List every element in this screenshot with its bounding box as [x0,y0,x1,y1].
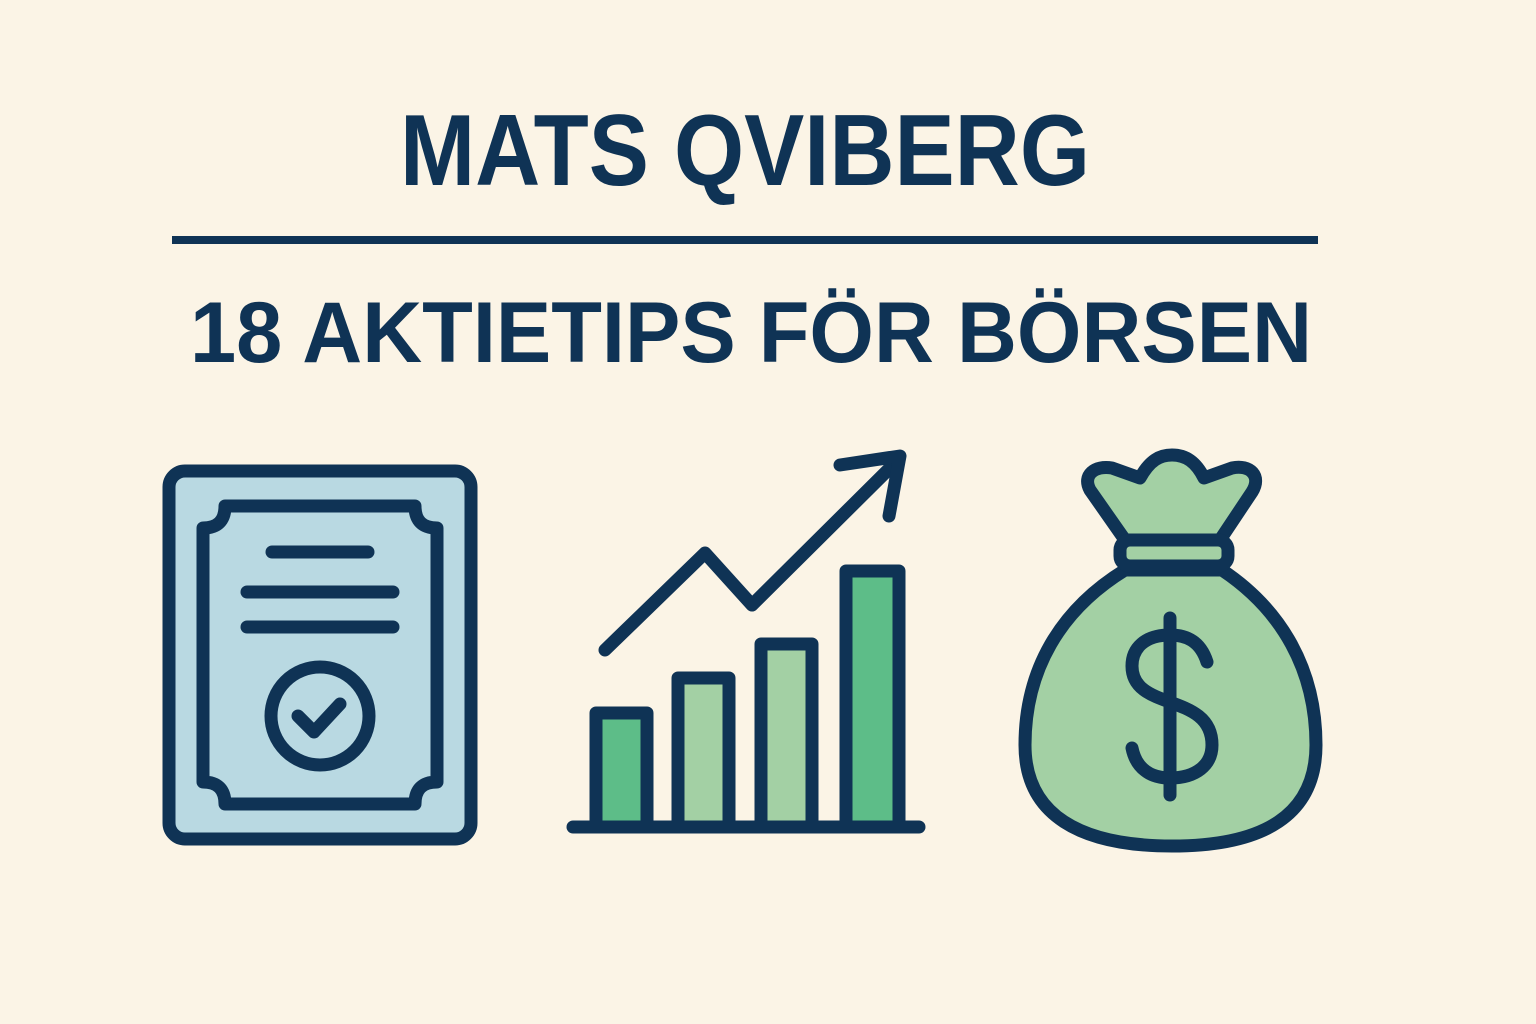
icon: certificate [169,471,471,839]
subtitle: 18 AKTIETIPS FÖR BÖRSEN [190,285,1312,381]
title: MATS QVIBERG [400,95,1090,207]
icon: bar chart with arrow [573,456,919,827]
icon: money bag [1025,455,1316,846]
